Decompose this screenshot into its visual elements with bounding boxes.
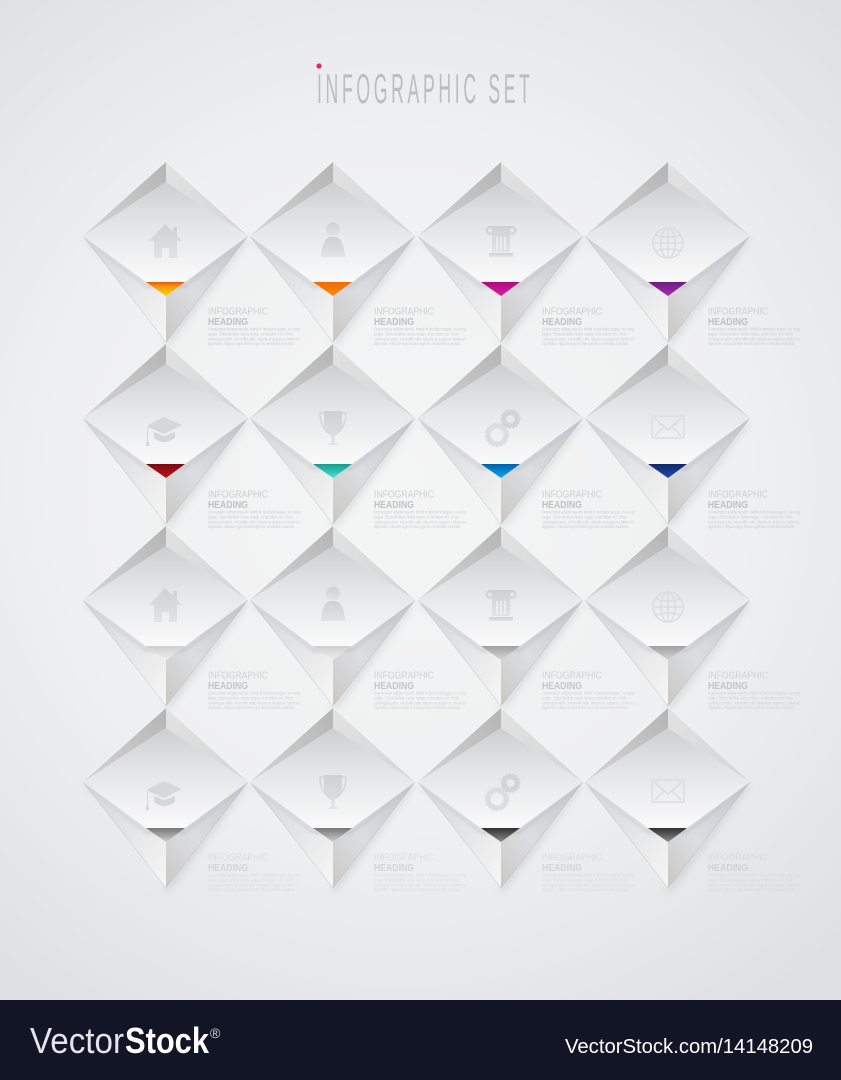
text block: row 2 column 2: HEADING: [374, 500, 414, 511]
text block: row 3 column 2: INFOGRAPHIC: [374, 670, 434, 682]
text block: row 1 column 1: HEADING: [208, 317, 248, 328]
text block: row 2 column 2: augue. Etiam facilisis varius neque, et tincidunt orci. Proin: [374, 514, 460, 520]
text block: row 1 column 1: [208, 306, 301, 346]
text block: row 3 column 4: dignissim. Aliquam eget lectus eget leo venenatis euismod.: [708, 705, 795, 710]
icon: gears: [486, 774, 520, 810]
footer logo: Stock: Stock: [125, 1020, 210, 1061]
text block: row 1 column 4: Consectetur adipiscing elit. Morbi in tincidunt augue, eu cong: [708, 326, 801, 332]
panel: row 4 column 1, graduation: [83, 708, 248, 895]
text block: row 1 column 4: consequat enim, vel mollis odio. Mauris at augue ac lorem ac: [708, 336, 800, 342]
text block: row 4 column 1: Consectetur adipiscing elit. Morbi in tincidunt augue, eu cong: [208, 872, 301, 878]
text block: row 2 column 1: augue. Etiam facilisis varius neque, et tincidunt orci. Proin: [208, 514, 294, 520]
text block: row 4 column 2: dignissim. Aliquam eget lectus eget leo venenatis euismod.: [374, 887, 461, 892]
text block: row 4 column 2: augue. Etiam facilisis varius neque, et tincidunt orci. Proin: [374, 878, 460, 882]
text block: row 2 column 4: dignissim. Aliquam eget lectus eget leo venenatis euismod.: [708, 524, 795, 529]
text block: row 3 column 3: dignissim. Aliquam eget lectus eget leo venenatis euismod.: [542, 705, 629, 710]
text block: row 2 column 3: [542, 490, 635, 529]
text block: row 1 column 3: Consectetur adipiscing elit. Morbi in tincidunt augue, eu cong: [542, 326, 635, 332]
text block: row 3 column 4: consequat enim, vel mollis odio. Mauris at augue ac lorem ac: [708, 700, 800, 706]
icon: globe: [653, 228, 683, 258]
text block: row 3 column 3: consequat enim, vel mollis odio. Mauris at augue ac lorem ac: [542, 700, 634, 706]
text block: row 3 column 3: INFOGRAPHIC: [542, 670, 602, 682]
text block: row 1 column 2: Consectetur adipiscing elit. Morbi in tincidunt augue, eu cong: [374, 326, 467, 332]
dark notch: [146, 828, 185, 842]
colour notch: dark red: [146, 464, 185, 478]
text block: row 1 column 1: consequat enim, vel mollis odio. Mauris at augue ac lorem ac: [208, 336, 300, 342]
registered mark: ®: [210, 1025, 221, 1041]
text block: row 2 column 3: augue. Etiam facilisis varius neque, et tincidunt orci. Proin: [542, 514, 628, 520]
text block: row 2 column 3: dignissim. Aliquam eget lectus eget leo venenatis euismod.: [542, 524, 629, 529]
text block: row 2 column 1: INFOGRAPHIC: [208, 490, 268, 500]
text block: row 1 column 2: dignissim. Aliquam eget lectus eget leo venenatis euismod.: [374, 341, 461, 346]
icon: house: [149, 588, 182, 622]
text block: row 4 column 4: consequat enim, vel mollis odio. Mauris at augue ac lorem ac: [708, 882, 800, 888]
text block: row 3 column 2: Consectetur adipiscing elit. Morbi in tincidunt augue, eu cong: [374, 690, 467, 696]
text block: row 4 column 4: INFOGRAPHIC: [708, 852, 768, 864]
panel: row 4 column 2, trophy: [250, 708, 415, 895]
colour notch: teal: [313, 464, 352, 478]
text block: row 4 column 2: [374, 852, 467, 892]
text block: row 3 column 1: HEADING: [208, 681, 248, 692]
panel: row 2 column 3, gears: [418, 344, 583, 531]
text block: row 3 column 3: [542, 670, 635, 710]
text block: row 4 column 1: [208, 852, 301, 892]
text block: row 3 column 2: dignissim. Aliquam eget lectus eget leo venenatis euismod.: [374, 705, 461, 710]
colour notch: orange yellow: [146, 282, 185, 296]
text block: row 2 column 4: consequat enim, vel mollis odio. Mauris at augue ac lorem ac: [708, 520, 800, 524]
text block: row 4 column 2: HEADING: [374, 863, 414, 874]
text block: row 4 column 1: HEADING: [208, 863, 248, 874]
text block: row 3 column 2: [374, 670, 467, 710]
text block: row 1 column 4: INFOGRAPHIC: [708, 306, 768, 318]
icon: envelope: [652, 416, 684, 438]
text block: row 4 column 3: consequat enim, vel mollis odio. Mauris at augue ac lorem ac: [542, 882, 634, 888]
icon: trophy: [320, 775, 346, 809]
text block: row 2 column 1: HEADING: [208, 500, 248, 511]
text block: row 2 column 2: INFOGRAPHIC: [374, 490, 434, 500]
text block: row 3 column 3: HEADING: [542, 681, 582, 692]
text block: row 2 column 4: Consectetur adipiscing elit. Morbi in tincidunt augue, eu cong: [708, 510, 801, 514]
text block: row 1 column 4: augue. Etiam facilisis varius neque, et tincidunt orci. Proin: [708, 332, 794, 336]
icon: graduation cap: [146, 417, 182, 446]
text block: row 4 column 1: consequat enim, vel mollis odio. Mauris at augue ac lorem ac: [208, 882, 300, 888]
text block: row 3 column 2: HEADING: [374, 681, 414, 692]
colour notch: navy: [648, 464, 687, 478]
text block: row 4 column 1: augue. Etiam facilisis varius neque, et tincidunt orci. Proin: [208, 878, 294, 882]
text block: row 4 column 4: dignissim. Aliquam eget lectus eget leo venenatis euismod.: [708, 887, 795, 892]
icon: gears: [486, 410, 520, 446]
text block: row 3 column 1: dignissim. Aliquam eget lectus eget leo venenatis euismod.: [208, 705, 295, 710]
text block: row 3 column 1: augue. Etiam facilisis varius neque, et tincidunt orci. Proin: [208, 696, 294, 700]
text block: row 2 column 1: Consectetur adipiscing elit. Morbi in tincidunt augue, eu cong: [208, 510, 301, 514]
footer bar: [0, 1000, 841, 1080]
text block: row 4 column 3: Consectetur adipiscing elit. Morbi in tincidunt augue, eu cong: [542, 872, 635, 878]
text block: row 2 column 2: [374, 490, 467, 529]
text block: row 1 column 2: [374, 306, 467, 346]
text block: row 2 column 4: [708, 490, 801, 529]
icon: envelope: [652, 780, 684, 802]
text block: row 2 column 3: HEADING: [542, 500, 582, 511]
text block: row 4 column 3: [542, 852, 635, 892]
panel: row 1 column 3, column: [418, 162, 583, 349]
panel: row 2 column 1, graduation: [83, 344, 248, 531]
text block: row 4 column 2: INFOGRAPHIC: [374, 852, 434, 864]
dark notch: [481, 828, 520, 842]
icon: trophy: [320, 411, 346, 445]
text block: row 2 column 3: INFOGRAPHIC: [542, 490, 602, 500]
text block: row 2 column 2: consequat enim, vel mollis odio. Mauris at augue ac lorem ac: [374, 520, 466, 524]
dark notch: [648, 828, 687, 842]
grey notch: [313, 646, 352, 660]
text block: row 2 column 3: consequat enim, vel mollis odio. Mauris at augue ac lorem ac: [542, 520, 634, 524]
text block: row 1 column 2: consequat enim, vel mollis odio. Mauris at augue ac lorem ac: [374, 336, 466, 342]
grey notch: [146, 646, 185, 660]
icon: person: [321, 586, 345, 621]
text block: row 4 column 3: augue. Etiam facilisis varius neque, et tincidunt orci. Proin: [542, 878, 628, 882]
text block: row 1 column 4: [708, 306, 801, 346]
panel: row 2 column 2, trophy: [250, 344, 415, 531]
colour notch: purple: [648, 282, 687, 296]
title: INFOGRAPHIC SET: [317, 65, 530, 112]
icon: classical column: [486, 590, 516, 621]
text block: row 1 column 3: dignissim. Aliquam eget lectus eget leo venenatis euismod.: [542, 341, 629, 346]
text block: row 3 column 1: consequat enim, vel mollis odio. Mauris at augue ac lorem ac: [208, 700, 300, 706]
panel: row 4 column 3, gears: [418, 708, 583, 895]
text block: row 1 column 3: augue. Etiam facilisis varius neque, et tincidunt orci. Proin: [542, 332, 628, 336]
text block: row 2 column 4: augue. Etiam facilisis varius neque, et tincidunt orci. Proin: [708, 514, 794, 520]
panel: row 2 column 4, mail: [585, 344, 750, 531]
text block: row 1 column 1: dignissim. Aliquam eget lectus eget leo venenatis euismod.: [208, 341, 295, 346]
text block: row 1 column 3: consequat enim, vel mollis odio. Mauris at augue ac lorem ac: [542, 336, 634, 342]
text block: row 3 column 4: INFOGRAPHIC: [708, 670, 768, 682]
text block: row 3 column 2: augue. Etiam facilisis varius neque, et tincidunt orci. Proin: [374, 696, 460, 700]
panel: row 1 column 2, person: [250, 162, 415, 349]
text block: row 2 column 4: INFOGRAPHIC: [708, 490, 768, 500]
text block: row 4 column 3: dignissim. Aliquam eget lectus eget leo venenatis euismod.: [542, 887, 629, 892]
dark notch: [313, 828, 352, 842]
text block: row 4 column 3: INFOGRAPHIC: [542, 852, 602, 864]
panel: row 3 column 3, column: [418, 526, 583, 713]
text block: row 2 column 2: Consectetur adipiscing elit. Morbi in tincidunt augue, eu cong: [374, 510, 467, 514]
text block: row 3 column 3: augue. Etiam facilisis varius neque, et tincidunt orci. Proin: [542, 696, 628, 700]
icon: classical column: [486, 226, 516, 257]
text block: row 3 column 4: [708, 670, 801, 710]
text block: row 2 column 1: dignissim. Aliquam eget lectus eget leo venenatis euismod.: [208, 524, 295, 529]
text block: row 4 column 4: HEADING: [708, 863, 748, 874]
text block: row 3 column 1: INFOGRAPHIC: [208, 670, 268, 682]
text block: row 2 column 1: [208, 490, 301, 529]
text block: row 1 column 2: HEADING: [374, 317, 414, 328]
text block: row 1 column 4: HEADING: [708, 317, 748, 328]
panel: row 3 column 4, globe: [585, 526, 750, 713]
colour notch: magenta: [481, 282, 520, 296]
text block: row 4 column 3: HEADING: [542, 863, 582, 874]
text block: row 4 column 1: INFOGRAPHIC: [208, 852, 268, 864]
text block: row 3 column 4: augue. Etiam facilisis varius neque, et tincidunt orci. Proin: [708, 696, 794, 700]
text block: row 3 column 4: Consectetur adipiscing elit. Morbi in tincidunt augue, eu cong: [708, 690, 801, 696]
text block: row 2 column 2: dignissim. Aliquam eget lectus eget leo venenatis euismod.: [374, 524, 461, 529]
icon: person: [321, 222, 345, 257]
text block: row 1 column 1: augue. Etiam facilisis varius neque, et tincidunt orci. Proin: [208, 332, 294, 336]
text block: row 1 column 2: INFOGRAPHIC: [374, 306, 434, 318]
footer id: VectorStock.com/14148209: [565, 1035, 813, 1058]
colour notch: blue: [481, 464, 520, 478]
icon: globe: [653, 592, 683, 622]
text block: row 3 column 2: consequat enim, vel mollis odio. Mauris at augue ac lorem ac: [374, 700, 466, 706]
text block: row 1 column 2: augue. Etiam facilisis varius neque, et tincidunt orci. Proin: [374, 332, 460, 336]
text block: row 4 column 4: augue. Etiam facilisis varius neque, et tincidunt orci. Proin: [708, 878, 794, 882]
text block: row 1 column 4: dignissim. Aliquam eget lectus eget leo venenatis euismod.: [708, 341, 795, 346]
grey notch: [481, 646, 520, 660]
icon: house: [149, 224, 182, 258]
text block: row 1 column 3: INFOGRAPHIC: [542, 306, 602, 318]
text block: row 4 column 2: consequat enim, vel mollis odio. Mauris at augue ac lorem ac: [374, 882, 466, 888]
panel: row 4 column 4, mail: [585, 708, 750, 895]
text block: row 2 column 4: HEADING: [708, 500, 748, 511]
colour notch: orange: [313, 282, 352, 296]
text block: row 3 column 3: Consectetur adipiscing elit. Morbi in tincidunt augue, eu cong: [542, 690, 635, 696]
panel: row 1 column 1, home: [83, 162, 248, 349]
text block: row 2 column 3: Consectetur adipiscing elit. Morbi in tincidunt augue, eu cong: [542, 510, 635, 514]
text block: row 1 column 3: [542, 306, 635, 346]
panel: row 3 column 2, person: [250, 526, 415, 713]
text block: row 1 column 3: HEADING: [542, 317, 582, 328]
text block: row 4 column 4: [708, 852, 801, 892]
text block: row 2 column 1: consequat enim, vel mollis odio. Mauris at augue ac lorem ac: [208, 520, 300, 524]
text block: row 4 column 2: Consectetur adipiscing elit. Morbi in tincidunt augue, eu cong: [374, 872, 467, 878]
text block: row 4 column 1: dignissim. Aliquam eget lectus eget leo venenatis euismod.: [208, 887, 295, 892]
panel: row 1 column 4, globe: [585, 162, 750, 349]
panel: row 3 column 1, home: [83, 526, 248, 713]
text block: row 3 column 1: Consectetur adipiscing elit. Morbi in tincidunt augue, eu cong: [208, 690, 301, 696]
text block: row 1 column 1: Consectetur adipiscing elit. Morbi in tincidunt augue, eu cong: [208, 326, 301, 332]
text block: row 4 column 4: Consectetur adipiscing elit. Morbi in tincidunt augue, eu cong: [708, 872, 801, 878]
text block: row 3 column 4: HEADING: [708, 681, 748, 692]
icon: graduation cap: [146, 781, 182, 810]
footer logo: Vector: Vector: [30, 1020, 124, 1061]
text block: row 3 column 1: [208, 670, 301, 710]
text block: row 1 column 1: INFOGRAPHIC: [208, 306, 268, 318]
grey notch: [648, 646, 687, 660]
